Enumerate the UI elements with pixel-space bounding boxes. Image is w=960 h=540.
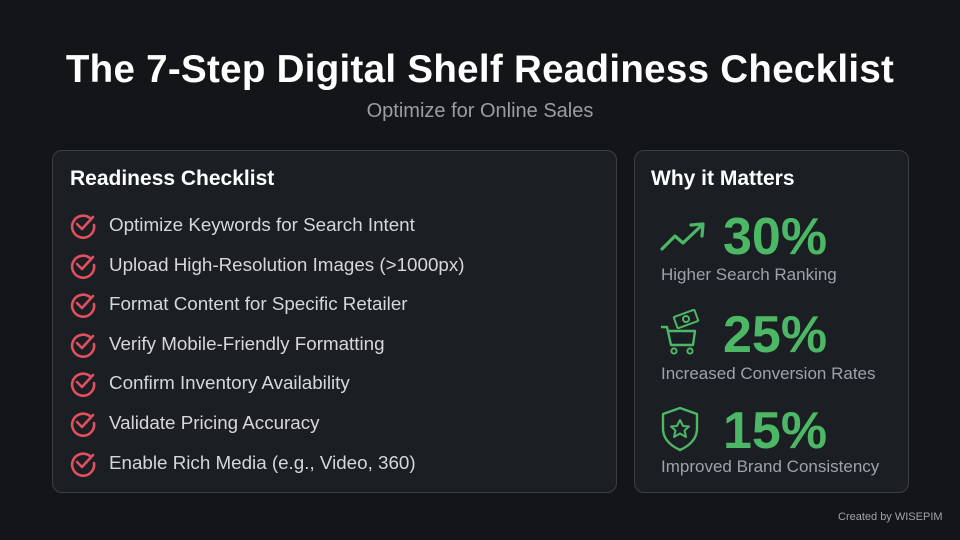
icon: shield star [662, 406, 698, 452]
panel heading: Readiness Checklist [70, 167, 274, 190]
subtitle: Optimize for Online Sales [367, 100, 593, 122]
title: The 7-Step Digital Shelf Readiness Checklist [66, 48, 894, 91]
stat: 15%: 15% [723, 402, 827, 460]
panel: why it matters [634, 150, 909, 493]
panel heading: Why it Matters [651, 167, 795, 190]
icon: trend arrow [660, 222, 705, 251]
stat: 25% [661, 306, 876, 383]
item 6: Validate Pricing Accuracy [109, 412, 320, 433]
item 4: Verify Mobile-Friendly Formatting [109, 333, 385, 354]
icon: cart with money [661, 309, 700, 355]
footer credit: Created by WISEPIM [838, 511, 943, 523]
panel: readiness checklist [52, 150, 617, 493]
item 2: Upload High-Resolution Images (>1000px) [109, 254, 464, 275]
stat: 30% [660, 208, 837, 284]
stat: 25%: Increased Conversion Rates [661, 364, 876, 383]
item 5: Confirm Inventory Availability [109, 372, 350, 393]
stat: 15% [661, 402, 880, 476]
item 1: Optimize Keywords for Search Intent [109, 214, 415, 235]
stat: 25%: 25% [723, 306, 827, 364]
stat: 15%: Improved Brand Consistency [661, 457, 879, 476]
item 7: Enable Rich Media (e.g., Video, 360) [109, 452, 416, 473]
item 3: Format Content for Specific Retailer [109, 293, 408, 314]
stat: 30%: 30% [723, 208, 827, 266]
stat: 30%: Higher Search Ranking [661, 265, 837, 284]
